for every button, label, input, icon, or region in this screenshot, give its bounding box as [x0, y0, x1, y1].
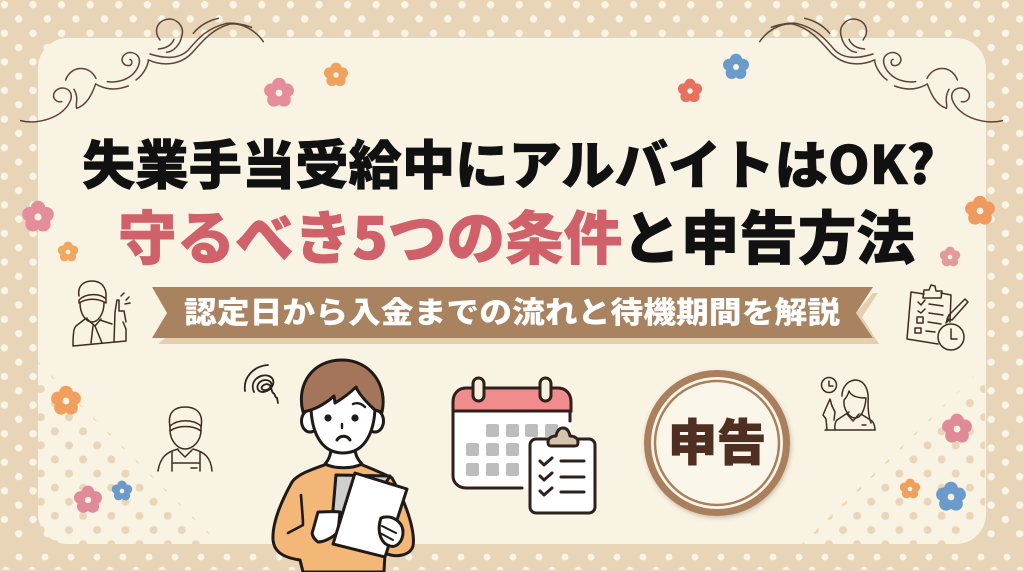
icon: clipboard checklist — [530, 428, 595, 513]
seal text: 申告 — [668, 404, 766, 475]
back paper — [333, 475, 390, 540]
right hand — [379, 517, 403, 546]
body — [273, 464, 413, 572]
badge: 申告 seal — [644, 370, 790, 516]
neck — [325, 448, 362, 468]
title: line 2: 守るべき5つの条件と申告方法 — [118, 192, 915, 276]
left hand — [312, 512, 340, 542]
icon: worry scribble — [245, 365, 278, 403]
ornament: top-right flourish — [760, 18, 1002, 122]
subtitle text: 認定日から入金までの流れと待機期間を解説 — [184, 288, 840, 332]
front paper — [333, 473, 407, 557]
icon: worker with raised finger — [73, 281, 130, 346]
illustration: worried person holding papers — [273, 360, 413, 572]
decoration: lower-right dotted triangle — [802, 365, 985, 544]
icon: checklist with pencil and clock — [907, 285, 968, 350]
icon: worker with apron — [158, 407, 212, 471]
ears — [302, 410, 318, 432]
title: line 1: 失業手当受給中にアルバイトはOK? — [82, 124, 935, 200]
decoration: lower-left dotted triangle — [38, 362, 220, 544]
icon: calendar — [453, 378, 571, 488]
date squares — [466, 424, 558, 476]
ribbon banner with subtitle — [152, 287, 879, 344]
flowers scattered around the card — [22, 54, 995, 513]
icon: woman with clock bubble — [822, 378, 875, 430]
sleeve fold — [288, 495, 303, 533]
eyes nose mouth — [324, 414, 332, 422]
hair — [301, 360, 383, 412]
face — [311, 385, 375, 453]
ornament: top-left flourish — [21, 18, 263, 122]
